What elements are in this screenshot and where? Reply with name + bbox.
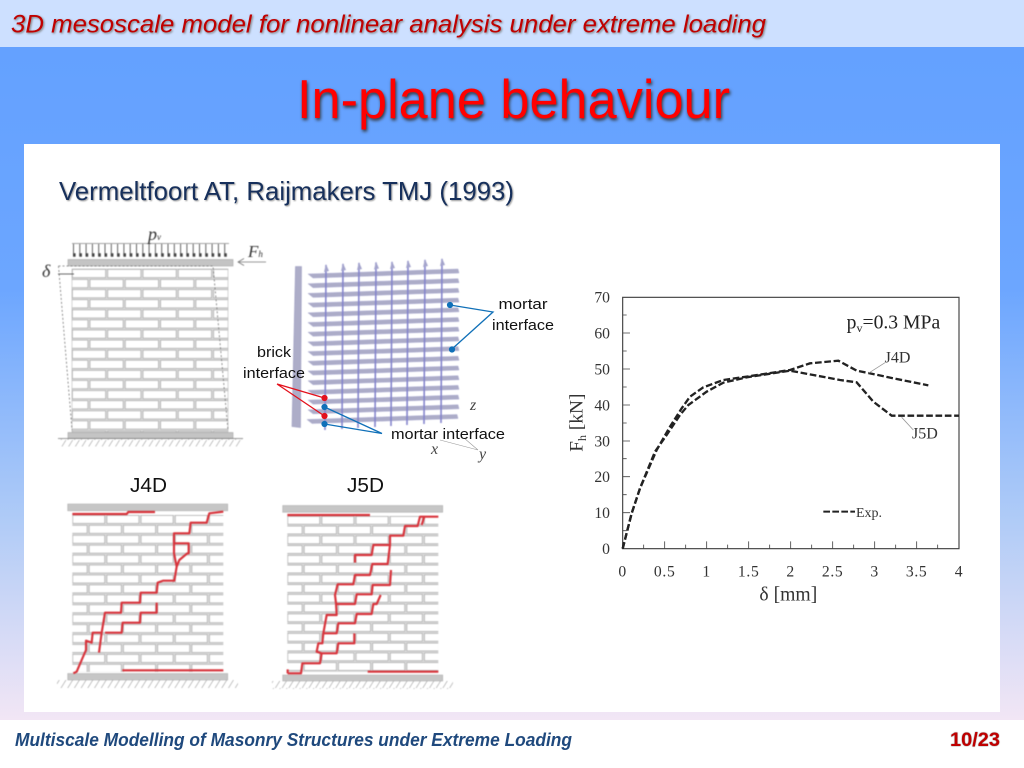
J5D crack pattern wall — [272, 506, 453, 689]
series label J4D: J4D — [885, 349, 910, 366]
y axis title: h — [575, 435, 589, 441]
label: mortar interface right: interface — [492, 317, 554, 334]
mesh plates — [292, 258, 459, 430]
y axis tick labels: 0 — [602, 541, 610, 558]
y axis tick labels: 20 — [594, 469, 610, 486]
plot frame and ticks — [623, 297, 959, 549]
base beam and ground hatch — [58, 432, 243, 446]
delta displacement marker — [42, 261, 74, 281]
J4D label: J4D — [130, 475, 167, 497]
curve J5D — [623, 371, 959, 549]
x axis tick labels — [618, 564, 963, 581]
label: mortar interface right — [492, 296, 554, 334]
cracks — [72, 512, 223, 673]
load annotation: v — [856, 321, 862, 335]
label: brick interface — [243, 344, 305, 382]
x axis tick labels: 2 — [786, 564, 795, 581]
x axis tick labels: 1 — [702, 564, 711, 581]
x axis title: δ [mm] — [759, 584, 817, 606]
axis labels: z — [469, 397, 477, 414]
delta displacement marker: δ — [42, 261, 51, 281]
leaders: mortar interface bottom — [322, 404, 382, 434]
white content panel — [24, 144, 1000, 712]
legend: Exp. — [856, 506, 882, 521]
leaders: brick interface — [277, 384, 327, 419]
y axis tick labels: 70 — [594, 290, 610, 307]
x axis tick labels: 0 — [618, 564, 627, 581]
axis labels: x — [430, 441, 438, 458]
brick wall — [72, 269, 228, 432]
wall test setup diagram — [42, 224, 266, 446]
axis labels — [430, 397, 487, 463]
label: mortar interface right: mortar — [498, 296, 548, 313]
deformed shape dashed outline — [58, 266, 228, 430]
J5D label: J5D — [347, 475, 384, 497]
y axis title: F — [567, 441, 588, 452]
y axis tick labels: 10 — [594, 505, 610, 522]
y axis tick labels: 50 — [594, 361, 610, 378]
label: brick interface: interface — [243, 365, 305, 382]
label: brick interface: brick — [257, 344, 292, 361]
series label J5D: J5D — [912, 426, 938, 443]
J4D crack pattern wall — [57, 504, 238, 688]
y axis title: [kN] — [567, 394, 588, 435]
y axis tick labels: 60 — [594, 325, 610, 342]
series leaders — [868, 363, 913, 430]
beams and ground — [57, 504, 238, 688]
curve J4D — [623, 361, 928, 549]
beams and ground — [272, 506, 453, 689]
y axis tick labels: 30 — [594, 433, 610, 450]
x axis tick labels: 3 — [870, 564, 879, 581]
label: mortar interface bottom: mortar interface — [391, 426, 505, 443]
footer text: Multiscale Modelling of Masonry Structures under Extreme Loading — [15, 730, 572, 750]
axis labels: y — [477, 446, 487, 463]
top loading beam — [68, 260, 233, 266]
x axis tick labels: 0.5 — [654, 564, 675, 581]
y axis tick labels — [594, 290, 610, 558]
pv label: pv — [146, 224, 161, 244]
Fh label and arrow: Fh — [247, 242, 263, 261]
cracks — [287, 515, 438, 673]
horizontal interface plates — [307, 269, 459, 424]
reference heading: Vermeltfoort AT, Raijmakers TMJ (1993) — [59, 176, 514, 206]
vertical plate top wedges — [324, 258, 445, 272]
y axis tick labels: 40 — [594, 397, 610, 414]
vertical interface plates — [325, 259, 442, 430]
separate vertical interface bar — [292, 266, 302, 428]
load-displacement chart — [567, 290, 963, 606]
header text: 3D mesoscale model for nonlinear analysis under extreme loading — [11, 10, 766, 38]
header band — [0, 0, 1024, 47]
load annotation: p — [847, 312, 856, 334]
Fh label and arrow — [238, 242, 266, 266]
vertical load arrows — [72, 244, 229, 255]
bricks — [72, 515, 223, 672]
load annotation: =0.3 MPa — [862, 312, 940, 334]
x axis tick labels: 3.5 — [906, 564, 927, 581]
x axis tick labels: 1.5 — [738, 564, 759, 581]
interface mesh diagram — [243, 258, 554, 463]
title: In-plane behaviour — [297, 68, 730, 130]
x axis tick labels: 2.5 — [822, 564, 843, 581]
page number: 10/23 — [950, 730, 1000, 751]
legend — [823, 506, 882, 521]
leaders: mortar interface right — [447, 302, 493, 352]
bricks — [287, 516, 438, 672]
x axis tick labels: 4 — [955, 564, 963, 581]
